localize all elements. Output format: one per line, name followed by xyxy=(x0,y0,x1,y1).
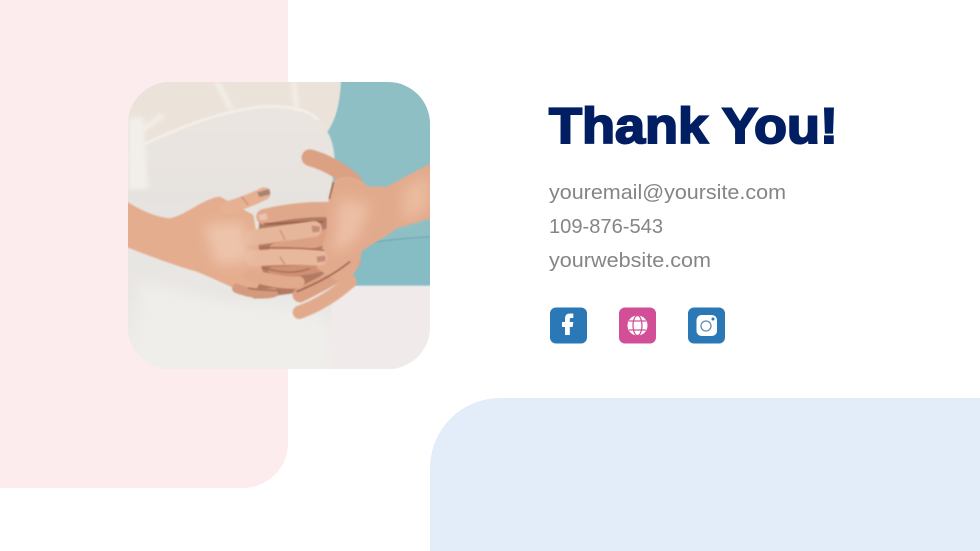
fingernails xyxy=(257,189,270,197)
right hand finger shadows xyxy=(264,182,350,292)
right hand and arm xyxy=(264,158,433,312)
panel: blue background xyxy=(430,398,980,551)
icon: facebook xyxy=(550,308,587,344)
icon: globe xyxy=(619,308,656,344)
teal shirt xyxy=(326,82,430,242)
photo: pregnant belly with hands xyxy=(123,78,433,372)
contact details xyxy=(549,181,786,272)
social icons xyxy=(550,308,725,344)
dress folds xyxy=(146,82,298,129)
left finger gaps xyxy=(248,248,324,291)
panel: pink background xyxy=(0,0,288,488)
phone: 109-876-543 xyxy=(549,215,663,238)
light trousers xyxy=(332,284,430,369)
knuckle creases xyxy=(242,197,285,265)
icon: instagram xyxy=(688,308,725,344)
dress upper bodice xyxy=(328,82,342,129)
waist tie xyxy=(146,105,318,144)
left hand and arm xyxy=(123,194,319,297)
skin highlights xyxy=(203,222,250,265)
email: youremail@yoursite.com xyxy=(549,181,786,204)
website: yourwebsite.com xyxy=(549,249,711,272)
white dress xyxy=(324,82,342,192)
dark base behind fingers xyxy=(252,216,328,300)
shirt crease xyxy=(377,236,430,242)
heading: Thank You!: Thank You! xyxy=(549,98,838,154)
